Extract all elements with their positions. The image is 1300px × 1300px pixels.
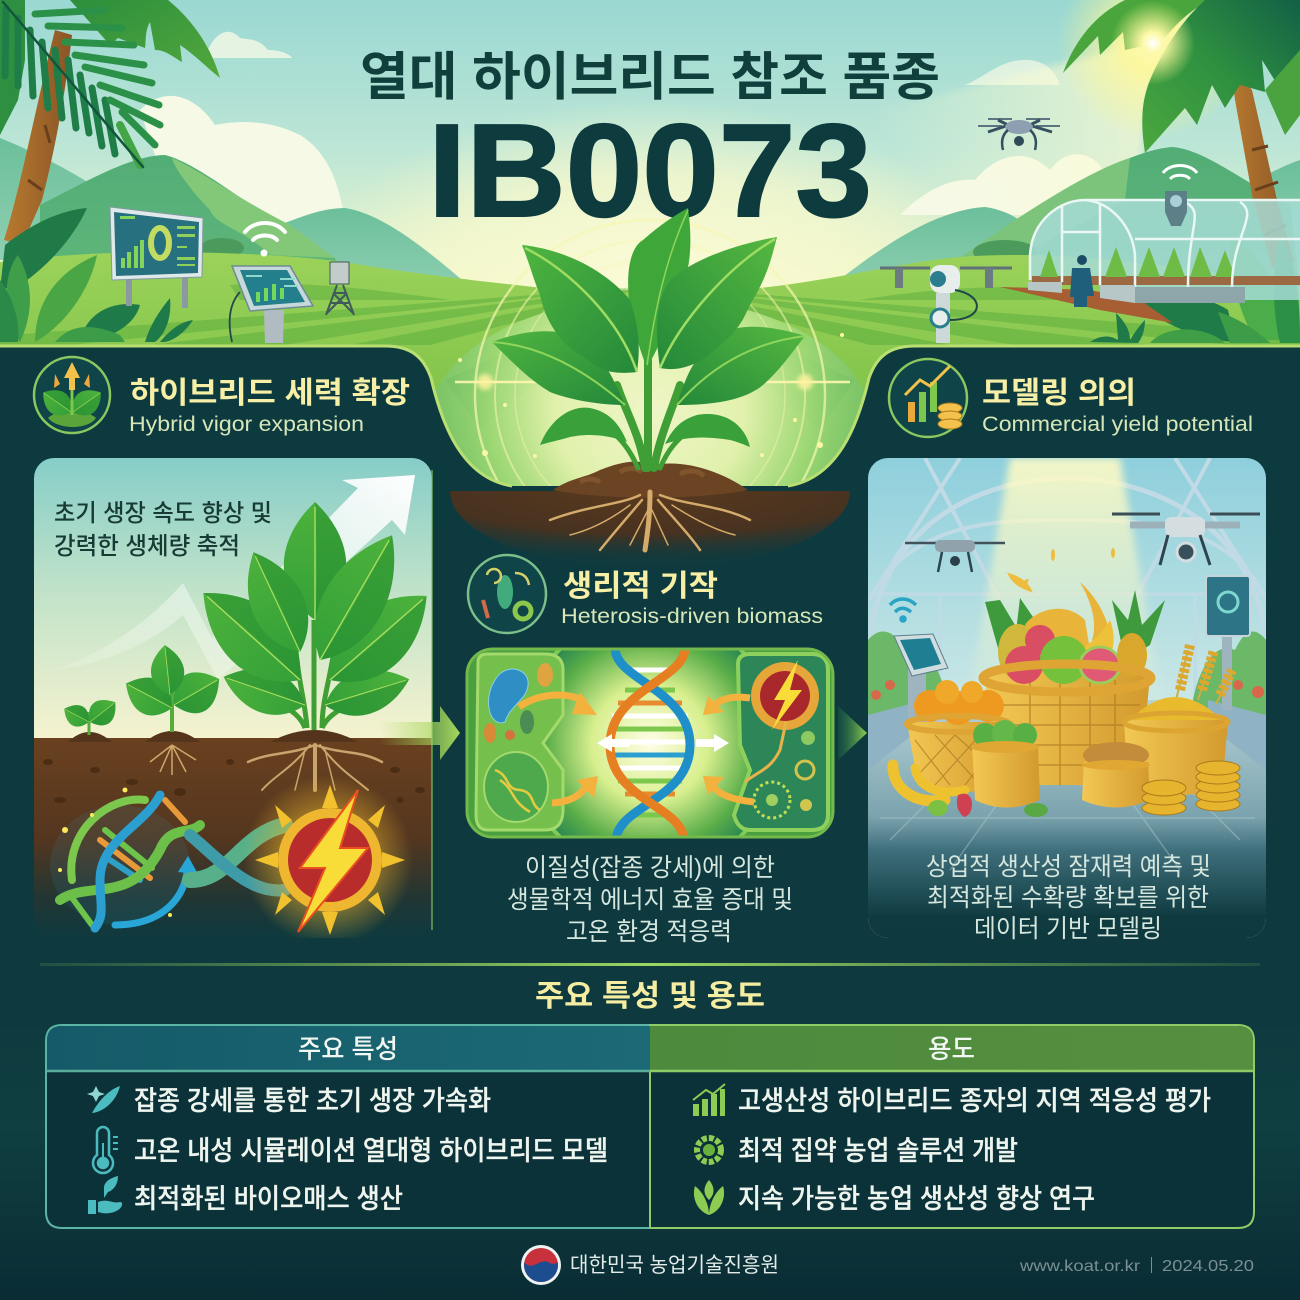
wifi signal	[890, 599, 916, 621]
medium seedling	[126, 645, 219, 775]
soil and roots	[450, 462, 850, 569]
leaf: lower left	[492, 331, 625, 405]
dark base with curved panel tabs	[0, 346, 1300, 1300]
soil specks	[43, 759, 425, 803]
column header: uses	[650, 1026, 1253, 1071]
floor	[868, 700, 1266, 938]
text: modeling description: 데이터 기반 모델링	[974, 915, 1162, 943]
text: modeling description: 최적화된 수확량 확보를 위한	[927, 884, 1209, 912]
panel: commercial yield greenhouse	[868, 458, 1266, 943]
greenhouse arches	[870, 458, 1266, 720]
DNA double helix	[610, 648, 690, 840]
trait row: biomass	[88, 1176, 403, 1214]
arrow: vigor to mechanism	[380, 706, 460, 760]
DNA strands	[50, 788, 285, 928]
title	[360, 49, 940, 244]
column header: uses: 용도	[928, 1034, 975, 1064]
left cell chamber	[476, 654, 563, 830]
leaf: low right	[665, 414, 750, 447]
text: mechanism description: 고온 환경 적응력	[566, 918, 732, 946]
grain sack	[1124, 645, 1232, 795]
icon: DNA and gear	[468, 555, 546, 633]
text: modeling description: 상업적 생산성 잠재력 예측 및	[926, 853, 1211, 881]
section header: hybrid vigor: Hybrid vigor expansion	[129, 413, 364, 436]
icon: growth rocket	[87, 1086, 120, 1113]
trait row: biomass: 최적화된 바이오매스 생산	[134, 1184, 403, 1214]
section header: modeling: 모델링 의의	[982, 377, 1136, 410]
footer: website and date: www.koat.or.kr	[1019, 1258, 1141, 1275]
section header: physiological mechanism: Heterosis-driven biomass	[561, 605, 823, 628]
main plant with soil and roots	[450, 208, 850, 569]
leaf: upper right	[657, 237, 777, 369]
icon: thermometer	[93, 1127, 118, 1173]
caption: 초기 생장 속도 향상 및	[54, 500, 272, 527]
large plant	[203, 502, 427, 792]
text: modeling description	[926, 853, 1211, 943]
use row: intensive farming: 최적 집약 농업 솔루션 개발	[738, 1136, 1018, 1166]
icon: leaf gear	[697, 1138, 721, 1162]
icon: vigor sprout	[34, 357, 110, 433]
top landscape scene	[0, 0, 1300, 570]
use row: sustainable productivity: 지속 가능한 농업 생산성 향상 연구	[738, 1184, 1095, 1214]
feather frond	[3, 2, 160, 167]
icon: sensor tower	[326, 262, 354, 315]
trait row: early growth: 잡종 강세를 통한 초기 생장 가속화	[134, 1086, 491, 1116]
table: traits and uses	[46, 1025, 1254, 1228]
main mountains	[40, 147, 1300, 290]
stems	[610, 360, 690, 468]
footer: organization emblem and name	[521, 1245, 779, 1285]
icon: taegeuk emblem	[521, 1245, 561, 1285]
coin stacks	[1142, 761, 1240, 815]
drone small	[905, 540, 1005, 572]
sun	[1058, 0, 1248, 138]
tree line	[200, 238, 1037, 264]
leaf: lower right	[677, 327, 805, 405]
broad frond	[70, 0, 220, 78]
large frond	[1142, 0, 1300, 153]
leaf: low left	[540, 408, 627, 445]
sun rays	[880, 40, 1155, 290]
left palm tree	[0, 0, 220, 245]
central fruit basket	[983, 582, 1165, 785]
foreground bushes left	[0, 208, 193, 342]
icon: yield chart with coins	[889, 359, 967, 437]
icon: tablet on stand	[230, 266, 313, 343]
text: mechanism description: 이질성(잡종 강세)에 의한	[525, 854, 775, 882]
flow arrows	[519, 692, 754, 803]
lightning energy emblem	[246, 780, 409, 938]
trait row: heat tolerance: 고온 내성 시뮬레이션 열대형 하이브리드 모델	[134, 1136, 608, 1166]
variety code: IB0073	[428, 97, 872, 244]
icon: greenhouse	[1000, 200, 1300, 323]
nut sack	[1082, 742, 1150, 808]
icon: hand with sprout	[88, 1176, 122, 1214]
center glow	[545, 650, 748, 836]
sparkle and falling grains	[1010, 548, 1115, 590]
light beam	[977, 458, 1153, 676]
trait row: heat tolerance	[93, 1127, 608, 1173]
icon: bar chart	[693, 1084, 725, 1116]
divider	[40, 963, 1260, 966]
back mountains	[0, 138, 1300, 295]
growth arrow	[54, 475, 415, 680]
bananas	[893, 765, 965, 801]
back plants	[868, 631, 1266, 720]
section header: physiological mechanism: 생리적 기작	[563, 570, 718, 603]
small seedling	[64, 700, 116, 742]
icon: drone in sky	[978, 119, 1060, 150]
leaf: upper left	[522, 245, 639, 373]
icon: wifi and sensor right	[1163, 166, 1197, 226]
section header: hybrid vigor: 하이브리드 세력 확장	[130, 377, 410, 410]
green sack	[928, 720, 1048, 817]
section header: modeling: Commercial yield potential	[982, 413, 1253, 436]
title line: 열대 하이브리드 참조 품종	[360, 49, 940, 107]
icon: data monitor	[110, 207, 203, 308]
text: mechanism description	[507, 854, 793, 946]
leaf: top center	[628, 208, 690, 368]
clouds	[140, 32, 1120, 230]
table frame	[46, 1025, 1254, 1228]
use row: regional adaptation: 고생산성 하이브리드 종자의 지역 적응성 평가	[738, 1086, 1211, 1116]
section header: physiological mechanism	[468, 555, 823, 633]
data screen	[1206, 576, 1250, 710]
arrow: mechanism to modeling	[838, 706, 867, 760]
terraced fields	[0, 252, 1300, 500]
section header: modeling	[889, 359, 1253, 437]
gear energy icon	[751, 660, 819, 730]
footer: website and date: 2024.05.20	[1162, 1258, 1254, 1275]
caption	[54, 500, 272, 560]
sun-side frond	[1063, 0, 1210, 73]
right cell chamber	[734, 654, 828, 830]
caption: 강력한 생체량 축적	[54, 533, 240, 560]
heading: key traits and uses: 주요 특성 및 용도	[535, 980, 765, 1013]
text: mechanism description: 생물학적 에너지 효율 증대 및	[507, 886, 793, 914]
drone large	[1112, 514, 1260, 565]
panel: plant cell DNA diagram	[466, 648, 834, 838]
section header: hybrid vigor	[34, 357, 410, 436]
footer: website and date	[1019, 1257, 1254, 1275]
icon: robot sensor arm	[880, 265, 1012, 343]
icon: sprout wreath	[694, 1180, 724, 1215]
panel: hybrid vigor expansion	[34, 458, 447, 945]
footer: organization emblem and name: 대한민국 농업기술진흥원	[570, 1254, 779, 1277]
column header: traits: 주요 특성	[298, 1034, 398, 1064]
glow bubble	[428, 220, 872, 570]
column header: traits	[47, 1026, 650, 1071]
icon: wifi signal left	[245, 223, 285, 256]
orange basket	[907, 680, 1009, 792]
foreground bushes right	[1090, 236, 1300, 343]
tablet kiosk	[894, 634, 948, 730]
right palm tree	[1063, 0, 1300, 268]
